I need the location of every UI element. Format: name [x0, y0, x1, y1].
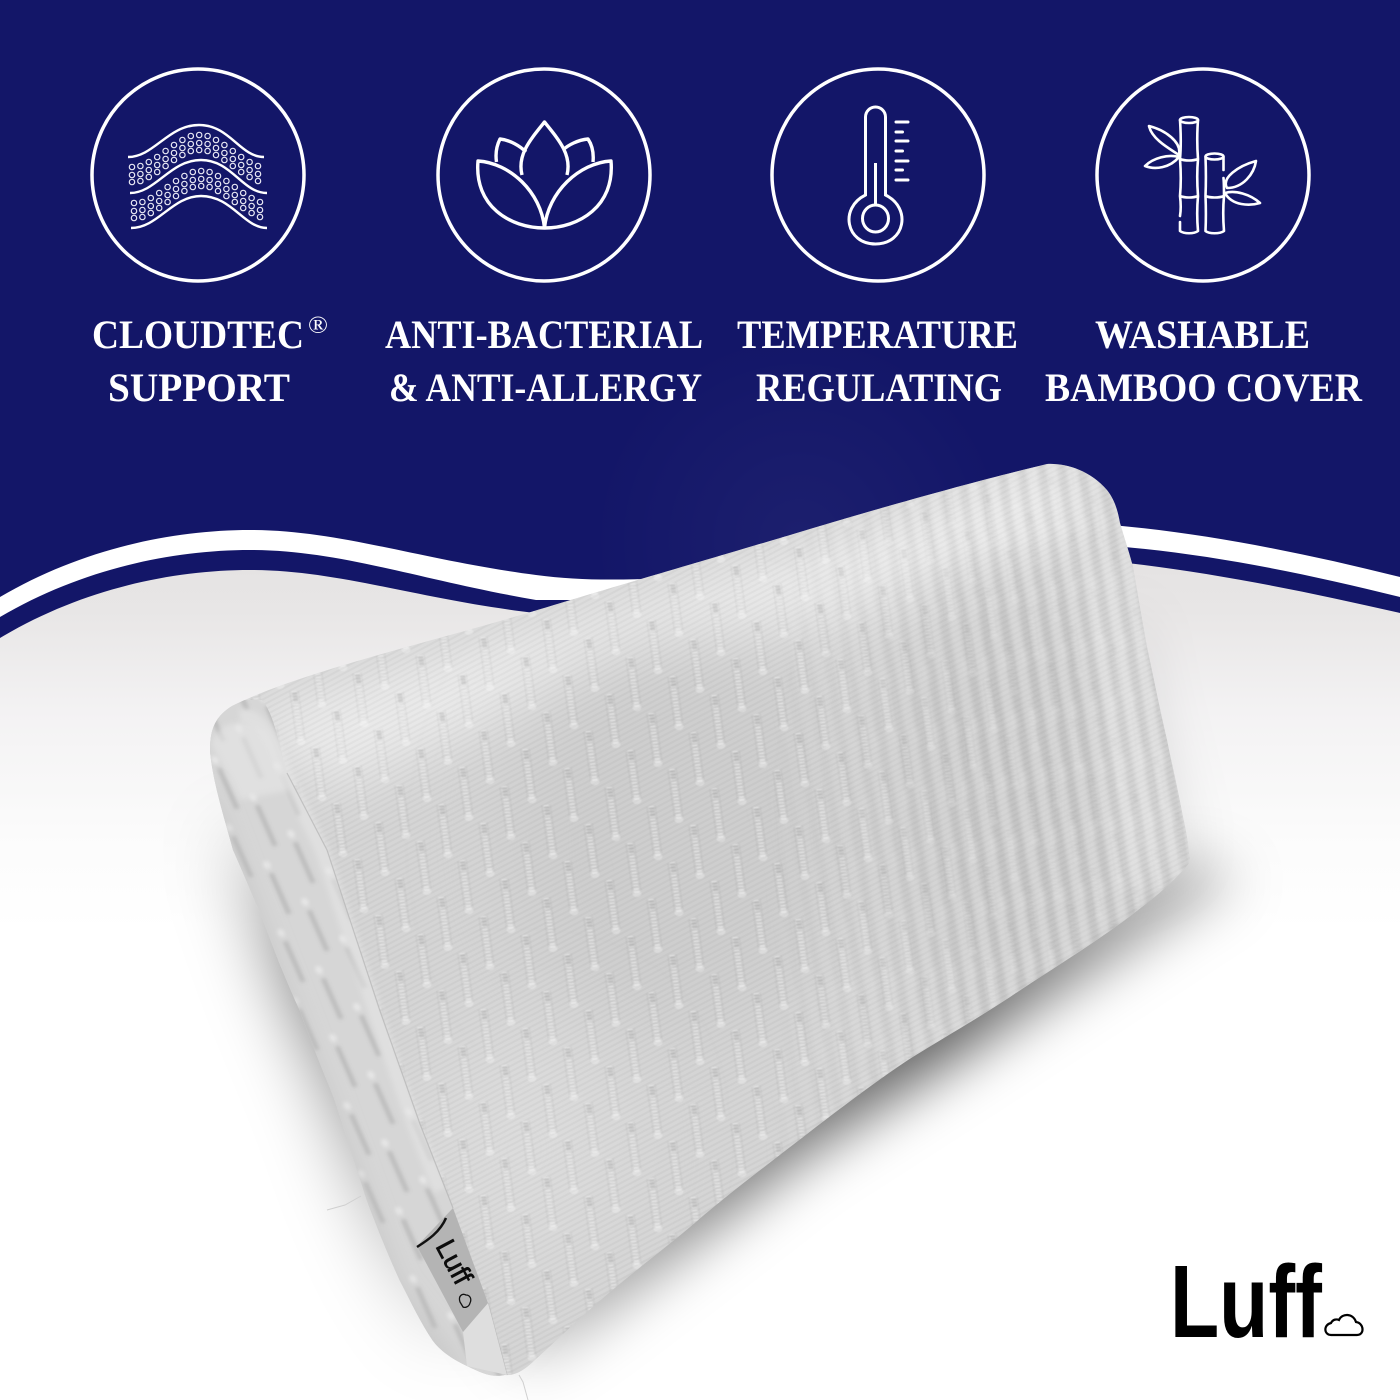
pillow end panel [210, 700, 502, 1376]
pillow [210, 464, 1189, 1376]
heading: temperature regulating [737, 312, 1018, 410]
heading: cloudtec support: ® [308, 313, 328, 339]
stitched face texture [254, 482, 1014, 1374]
tag brand text: Luff [430, 1234, 479, 1290]
pillow base [245, 464, 1188, 1376]
heading: anti-bacterial and anti-allergy: & ANTI-ALLERGY [389, 365, 702, 410]
logo wordmark: Luff [1170, 1244, 1323, 1359]
fine twill weave [180, 440, 1220, 1400]
end panel top highlight [216, 726, 286, 796]
circle [1097, 69, 1309, 281]
logo cloud [1325, 1315, 1363, 1335]
circle [438, 69, 650, 281]
icon: thermometer [849, 107, 908, 244]
feature: anti-bacterial [438, 69, 650, 281]
feature: washable bamboo cover [1097, 69, 1309, 281]
circle [92, 69, 304, 281]
tag top stitch [417, 1218, 446, 1247]
seam line [287, 773, 507, 1375]
feature: cloudtec support [92, 69, 304, 281]
heading: anti-bacterial and anti-allergy: ANTI-BACTERIAL [385, 312, 703, 357]
ribbed right texture [902, 464, 1180, 1041]
soft glow behind pillow [590, 330, 1010, 600]
heading: cloudtec support: SUPPORT [108, 365, 290, 410]
brand logo [1170, 1244, 1363, 1359]
tag background [417, 1208, 488, 1332]
icon: bamboo [1145, 117, 1260, 233]
pillow shading [266, 464, 1154, 1012]
feature: temperature regulating [772, 69, 984, 281]
white wave band left [0, 530, 680, 617]
heading: temperature regulating: TEMPERATURE [737, 312, 1018, 357]
white wave band right [1100, 524, 1400, 597]
end panel lower shade [226, 826, 448, 1354]
heading: washable bamboo cover [1045, 312, 1363, 410]
navy header background [0, 0, 1400, 700]
pillow cast shadow [225, 600, 1240, 1375]
end panel fill [210, 700, 504, 1376]
icon: lotus [478, 122, 611, 228]
heading: temperature regulating: REGULATING [756, 365, 1002, 410]
light floor with wave top [0, 560, 1400, 1400]
tag cloud [459, 1294, 471, 1307]
end panel texture [212, 700, 502, 1376]
circle [772, 69, 984, 281]
heading: washable bamboo cover: BAMBOO COVER [1045, 365, 1363, 410]
lower corner facet [463, 1303, 507, 1375]
heading: cloudtec support [92, 312, 328, 410]
heading: washable bamboo cover: WASHABLE [1095, 312, 1310, 357]
pillow fabric tag [417, 1208, 488, 1332]
heading: anti-bacterial and anti-allergy [385, 312, 703, 410]
heading: cloudtec support: CLOUDTEC [92, 312, 304, 357]
stray threads [327, 1196, 528, 1400]
piping highlight along seam [240, 716, 440, 1190]
icon: foam layers [128, 125, 267, 228]
